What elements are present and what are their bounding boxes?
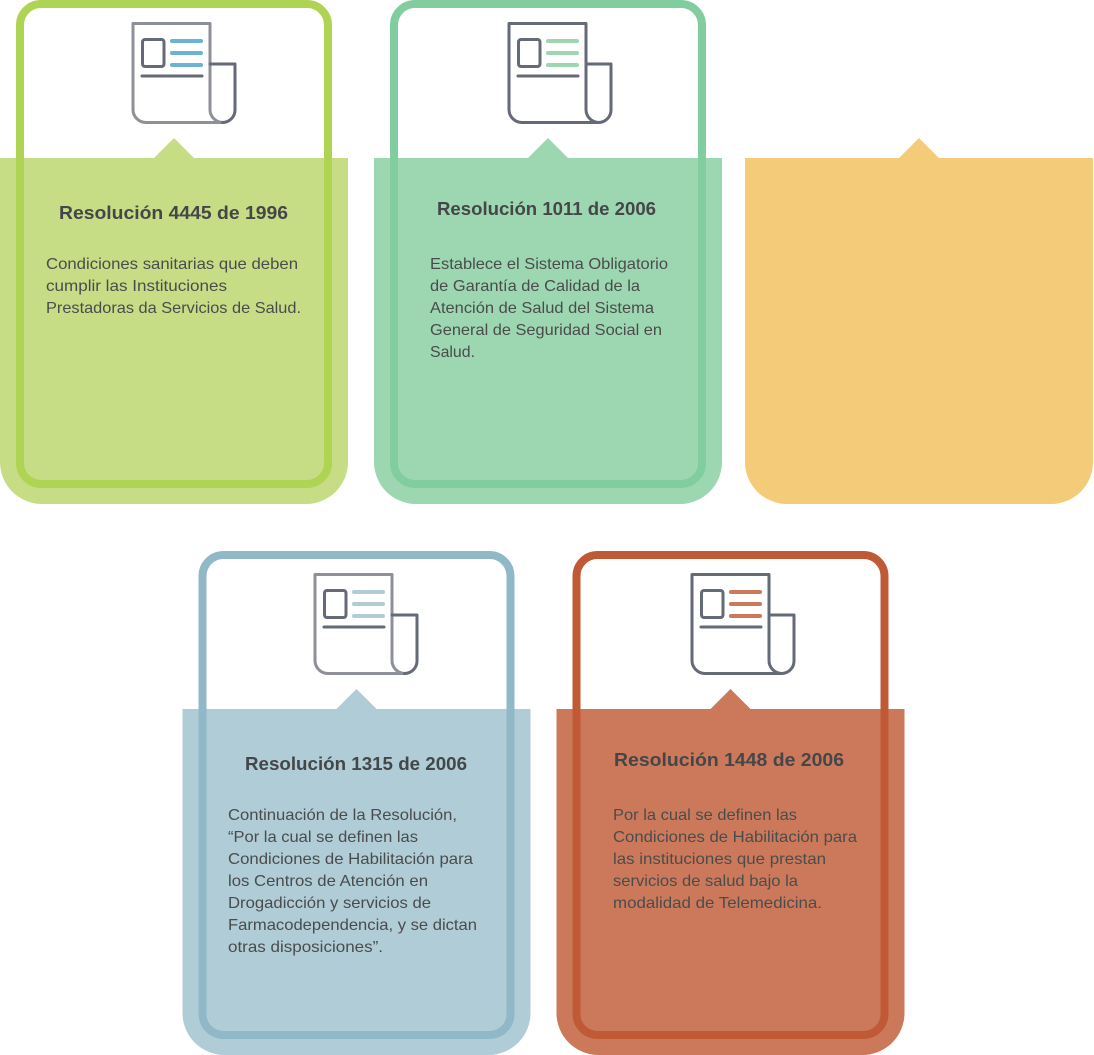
card outline — [202, 555, 510, 1035]
body text: Prestadoras da Servicios de Salud. — [46, 300, 301, 317]
body text — [46, 256, 301, 317]
panel: Resolución 4445 de 1996 — [0, 4, 348, 504]
body text: “Por la cual se definen las — [228, 829, 418, 846]
body text: Farmacodependencia, y se dictan — [228, 917, 477, 934]
card background — [0, 138, 348, 504]
panel: Resolución 1315 de 2006 — [182, 555, 530, 1055]
body text: Condiciones sanitarias que deben — [46, 256, 298, 273]
card outline — [394, 4, 702, 484]
body text: Condiciones de Habilitación para — [228, 851, 473, 868]
heading: Resolución 4445 de 1996 — [59, 203, 288, 223]
body text — [228, 807, 477, 956]
icon: newspaper — [692, 574, 794, 674]
body text: las instituciones que prestan — [613, 851, 826, 868]
body text: Por la cual se definen las — [613, 807, 797, 824]
body text: Drogadicción y servicios de — [228, 895, 431, 912]
card outline — [20, 4, 328, 484]
body text: los Centros de Atención en — [228, 873, 428, 890]
panel: Resolución 1011 de 2006 — [374, 4, 722, 504]
heading: Resolución 1448 de 2006 — [614, 750, 844, 770]
heading: Resolución 1315 de 2006 — [245, 754, 467, 774]
body text: servicios de salud bajo la — [613, 873, 798, 890]
card background — [182, 689, 530, 1055]
body text: General de Seguridad Social en — [430, 322, 662, 339]
body text: modalidad de Telemedicina. — [613, 895, 822, 912]
body text: Establece el Sistema Obligatorio — [430, 256, 668, 273]
panel: empty orange card — [745, 138, 1093, 504]
body text: Condiciones de Habilitación para — [613, 829, 857, 846]
heading: Resolución 1011 de 2006 — [437, 199, 656, 219]
body text: cumplir las Instituciones — [46, 278, 227, 295]
body text — [613, 807, 857, 912]
icon: newspaper — [509, 24, 611, 122]
card outline — [576, 555, 884, 1035]
body text: de Garantía de Calidad de la — [430, 278, 640, 295]
body text: Continuación de la Resolución, — [228, 807, 457, 824]
body text: Atención de Salud del Sistema — [430, 300, 654, 317]
icon: newspaper — [315, 574, 417, 674]
panel: Resolución 1448 de 2006 — [556, 555, 904, 1055]
card background — [374, 138, 722, 504]
body text: otras disposiciones”. — [228, 939, 383, 956]
body text: Salud. — [430, 344, 475, 361]
body text — [430, 256, 668, 361]
icon: newspaper — [133, 24, 235, 122]
card background — [556, 689, 904, 1055]
